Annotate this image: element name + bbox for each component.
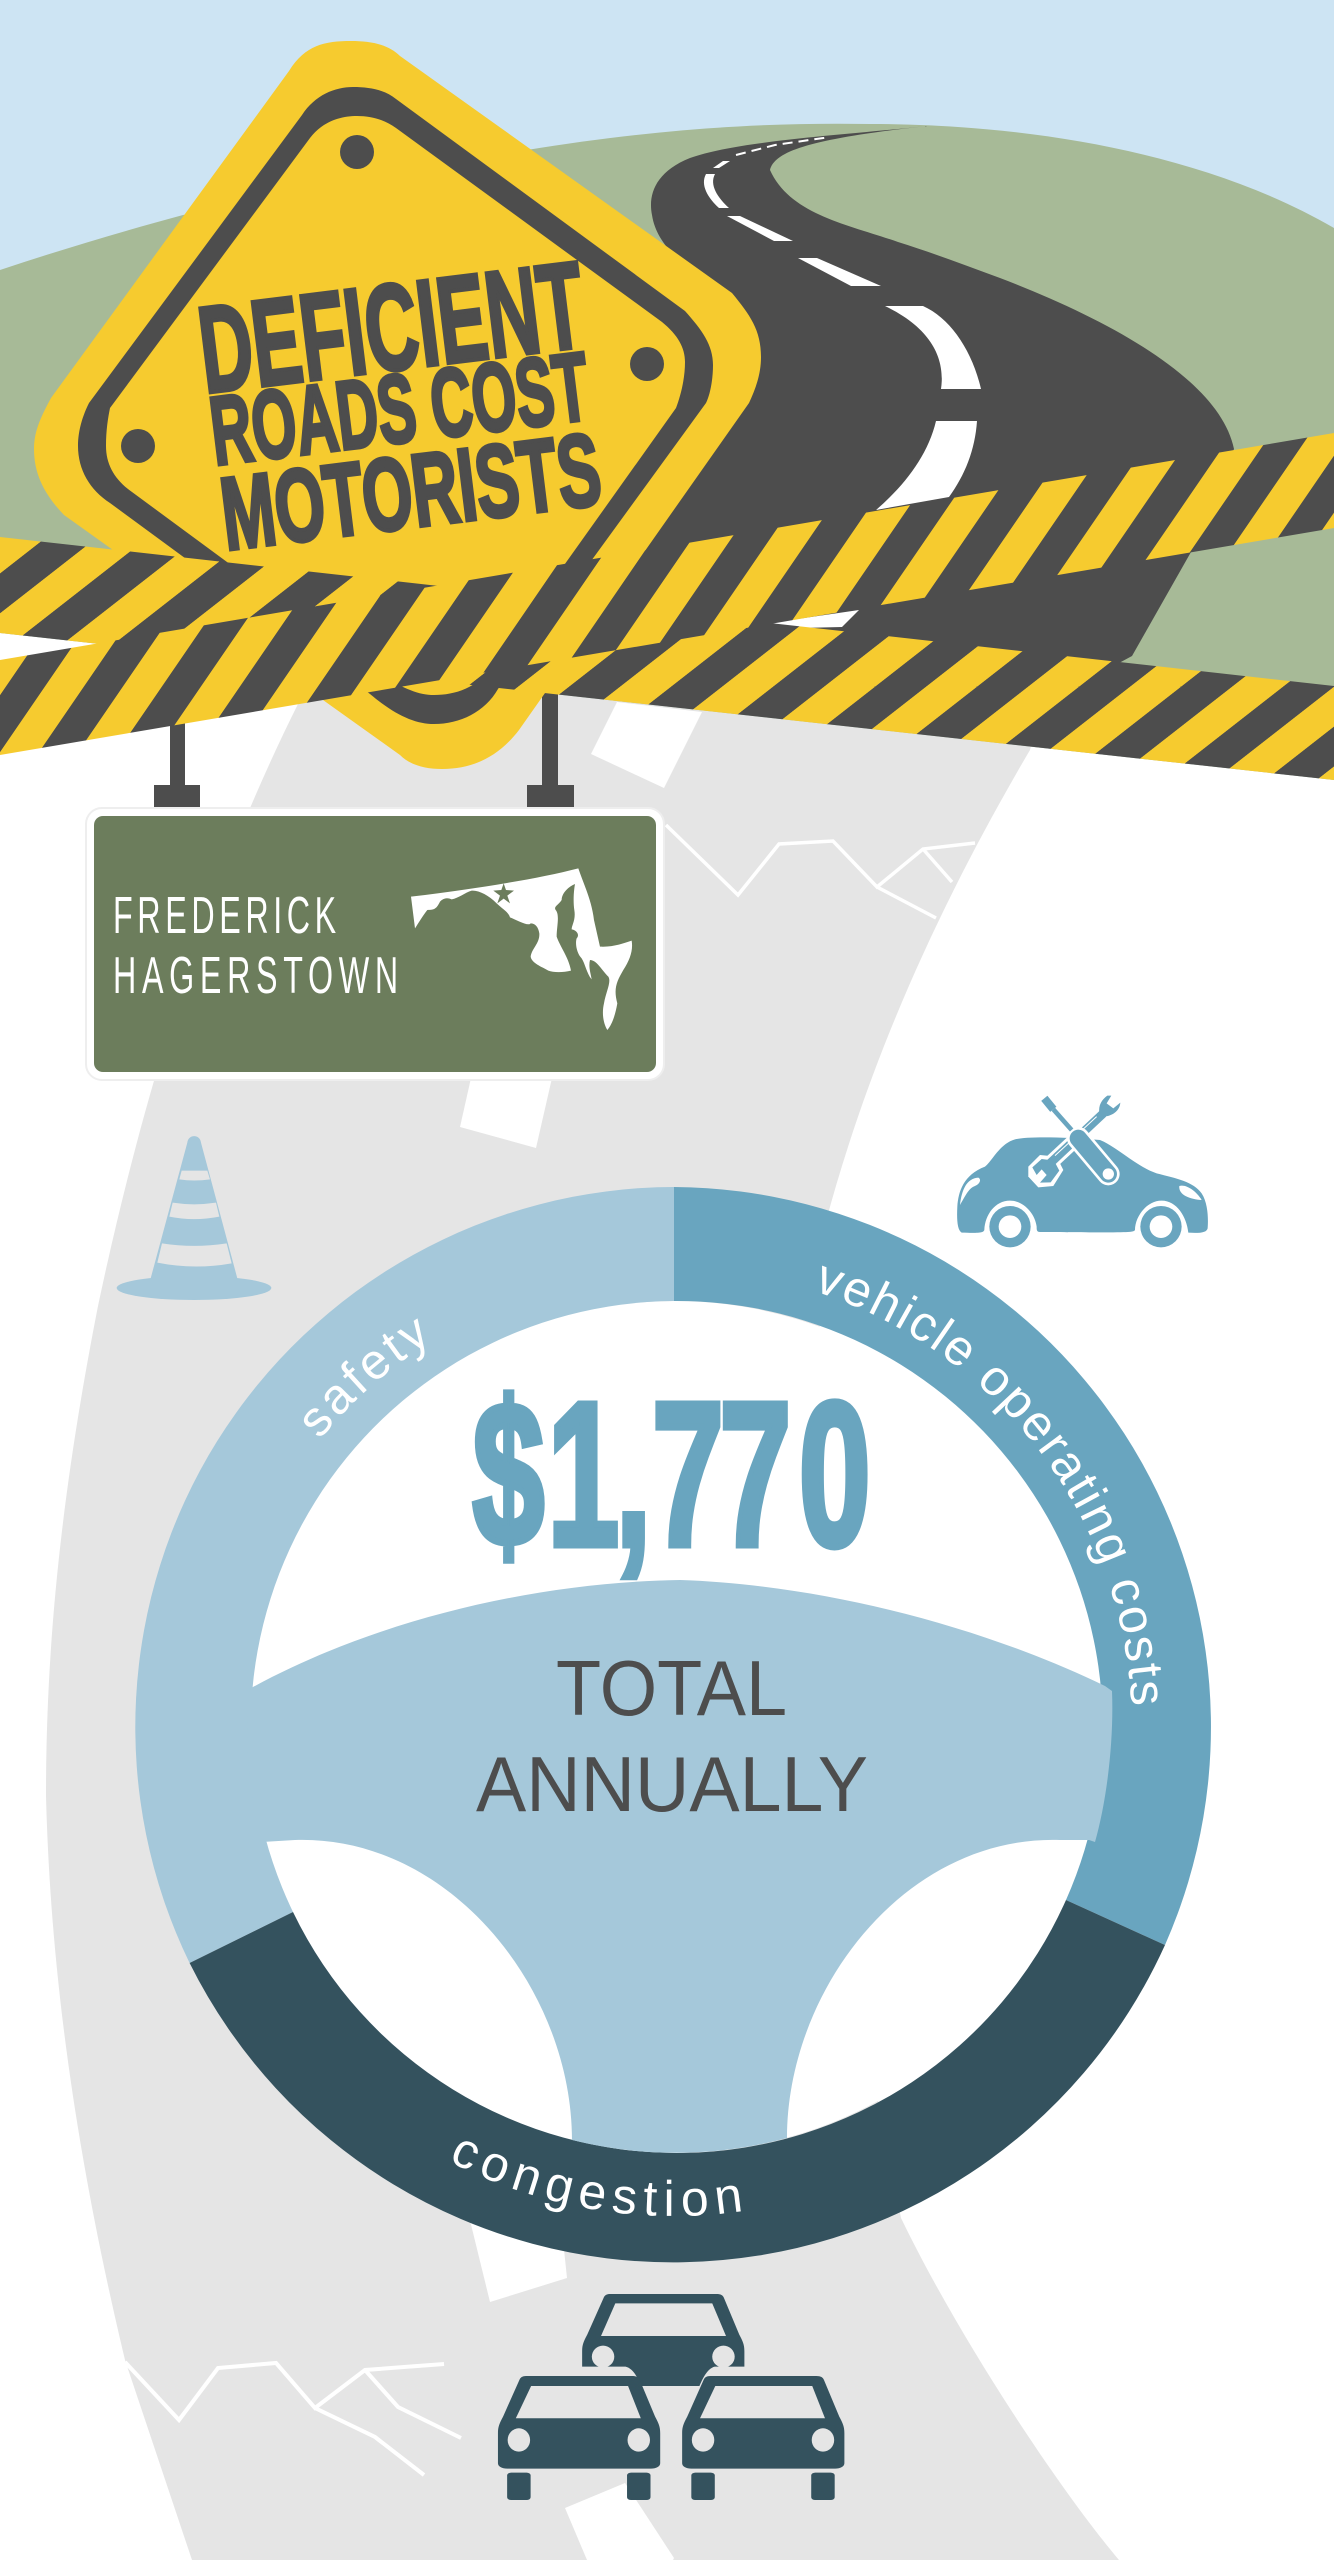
road cracks lower [125,2362,461,2475]
caution tape front [0,433,1334,755]
sign bolt holes [121,135,664,463]
wheel ring: vehicle operating costs segment [674,1187,1211,1945]
icon: screwdriver [1044,1098,1114,1180]
title: MOTORISTS [215,411,607,572]
total amount: $1,770 [472,1361,871,1589]
icon: wrench [1028,1096,1120,1187]
title [192,237,607,572]
wheel ring: congestion segment [190,1900,1165,2262]
title: DEFICIENT [192,237,591,420]
road cracks upper [666,825,975,918]
icon: traffic jam cars [498,2294,844,2500]
ring label: vehicle operating costs: vehicle operating costs [822,1266,1161,1704]
diamond warning sign [34,41,761,769]
wheel spokes [247,1580,1112,2153]
region names: HAGERSTOWN [113,947,398,1005]
sign posts [154,690,574,810]
sky and hills scene [0,0,1334,780]
wheel ring: safety segment [135,1187,674,1963]
caution tape back [0,537,1334,780]
winding asphalt road [600,125,1234,690]
grey road background [46,640,1119,2560]
total annually caption: TOTAL [556,1644,787,1732]
region names [113,887,398,1005]
icon: traffic cone [117,1136,271,1300]
front left car [498,2376,660,2500]
icon: Maryland map [411,868,632,1030]
ring label: safety: safety [304,1318,424,1436]
total annually caption: ANNUALLY [476,1740,868,1828]
title: ROADS COST [204,331,595,486]
front right car [682,2376,844,2500]
region names: FREDERICK [113,887,336,945]
green highway sign [86,808,664,1080]
back car [582,2294,744,2386]
icon: car with tools [957,1096,1208,1247]
ring label: congestion: congestion [454,2141,741,2216]
steering wheel [135,1187,1211,2262]
total annually caption [476,1644,868,1828]
